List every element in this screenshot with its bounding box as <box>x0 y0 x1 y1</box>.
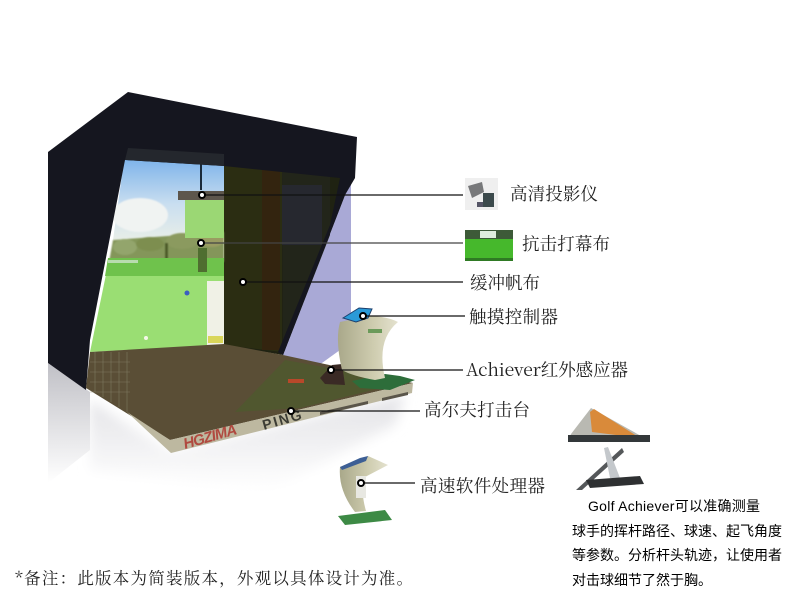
floor reflection <box>90 395 405 490</box>
label: buffer canvas: 缓冲帆布 <box>470 270 540 295</box>
touch controller <box>338 308 415 390</box>
projector <box>178 191 224 200</box>
soffit band <box>125 148 224 166</box>
lavender side wall <box>283 178 351 368</box>
label: golf platform: 高尔夫打击台 <box>424 397 530 422</box>
label: software processor: 高速软件处理器 <box>420 473 546 498</box>
description text: Golf Achiever可以准确测量 <box>588 498 760 514</box>
label: achiever sensor: Achiever红外感应器 <box>466 357 628 382</box>
golfer figure <box>198 248 207 272</box>
description text: 球手的挥杆路径、球速、起飞角度 <box>572 523 782 539</box>
blue ball marker <box>184 290 190 296</box>
description text <box>572 498 782 588</box>
fairway <box>90 260 224 352</box>
platform edge <box>127 383 413 453</box>
description text: 对击球细节了然于胸。 <box>572 572 712 588</box>
sky <box>113 160 224 240</box>
icon: golf course screen <box>465 230 513 261</box>
icon: achiever sensor dark <box>576 447 644 490</box>
platform top <box>86 344 413 440</box>
description text: 等参数。分析杆头轨迹，让使用者 <box>572 547 782 563</box>
label: touch controller: 触摸控制器 <box>469 304 558 329</box>
edge logo: HGZIMA: HGZIMA <box>181 421 239 453</box>
projection screen <box>90 160 224 352</box>
edge logo: PING: PING <box>260 406 303 433</box>
info card <box>207 281 224 345</box>
label: impact screen: 抗击打幕布 <box>522 231 610 256</box>
mesh net <box>90 352 130 412</box>
red swing mat mark <box>288 379 304 383</box>
achiever sensor <box>320 364 345 385</box>
simulator room illustration <box>48 92 413 490</box>
icon: achiever sensor orange <box>568 408 650 442</box>
back wall panel <box>224 165 345 355</box>
white ball <box>144 336 148 340</box>
black frame <box>48 92 357 390</box>
icon: projector <box>465 178 498 210</box>
leader lines and dots <box>198 192 465 486</box>
software processor <box>338 456 392 525</box>
projected green panel <box>185 200 224 238</box>
label: projector: 高清投影仪 <box>510 181 598 206</box>
footnote: *备注：此版本为简装版本，外观以具体设计为准。 <box>15 565 413 589</box>
edge logo marks <box>320 392 408 415</box>
tree line <box>109 232 224 265</box>
